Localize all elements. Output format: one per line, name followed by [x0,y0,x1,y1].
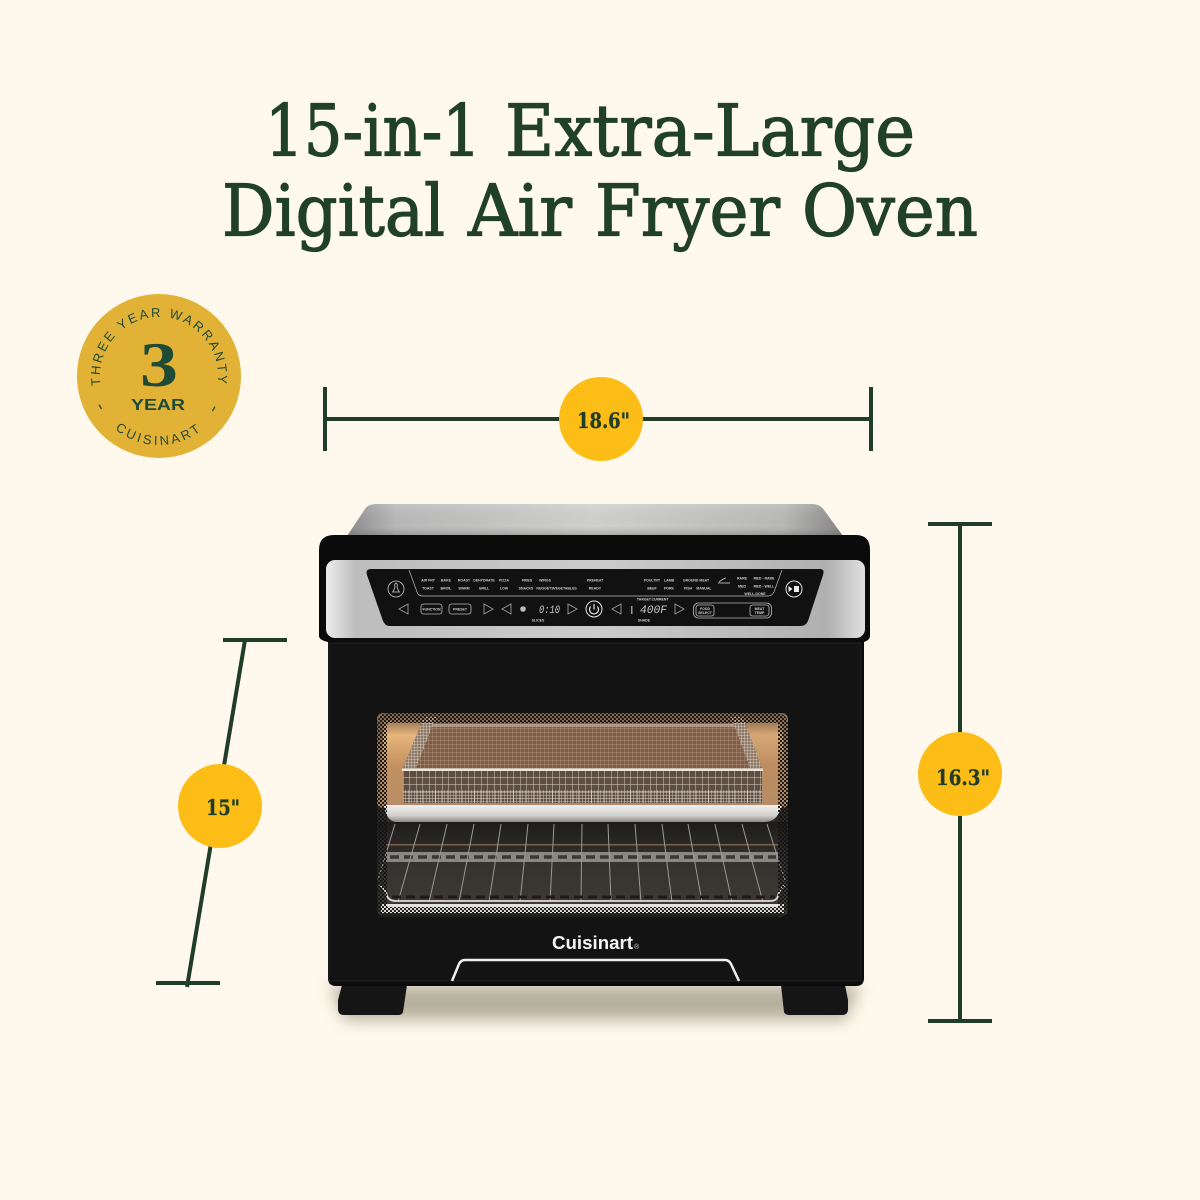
dimension: height 16.3 [918,524,1002,1021]
warranty badge: CUISINART [117,424,198,446]
mode labels: ROAST [458,578,471,582]
mode labels [421,576,775,596]
mode labels: PORK [664,586,675,590]
icon: thermometer [631,606,632,614]
mode labels: FRIES [522,578,533,582]
air fryer basket [402,717,763,803]
mode labels: WARM [458,586,470,590]
oven body [319,535,870,986]
food and meat button labels: FOOD [700,607,711,611]
floor shadow [330,985,860,1020]
Cuisinart logo: Cuisinart [552,932,633,953]
mode labels: GROUND MEAT [683,578,710,582]
Cuisinart logo: ® [634,943,640,951]
temperature labels: TARGET [637,598,652,602]
mode labels: DEHYDRATE [473,578,495,582]
mode labels: LAMB [664,578,675,582]
oven feet [338,985,848,1015]
food and meat button labels: SELECT [698,611,713,615]
mode labels: BAKE [441,578,452,582]
mode labels: READY [589,586,602,590]
lower cavity [378,822,787,914]
mode labels: VEGETABLES [553,586,577,590]
mode labels: GRILL [479,586,490,590]
preset button [449,604,471,614]
function button [421,604,442,614]
icon: meat probe [718,578,730,583]
icon: light bulb button [388,581,404,597]
dimension: width 18.6 [325,377,871,461]
dimension: height 16.3: 16.3" [936,765,990,790]
warm side walls [380,718,786,805]
mode labels: BEEF [647,586,658,590]
dimension: depth 15 [156,640,287,987]
food and meat button labels [698,607,765,615]
food and meat button labels: TEMP [755,611,765,615]
temperature labels: SHADE [638,618,651,622]
window frit edge [382,718,783,912]
mode labels: MED - RARE [754,576,775,580]
warranty badge: 3 [140,329,178,400]
dimension: width 18.6: 18.6" [577,408,630,433]
front rack rail [380,885,785,913]
function button: FUNCTION [422,607,441,611]
title: Fryer [595,170,780,252]
warranty badge [77,294,241,458]
mode labels: TOAST [422,586,435,590]
mode labels: MED [738,584,746,588]
mode labels: AIR FRY [421,578,436,582]
icon: clock [520,606,526,612]
oven window [377,713,788,917]
title: Digital [222,170,445,252]
upper cavity [377,713,788,808]
mode labels: POULTRY [644,578,661,582]
mode labels: LOW [500,586,509,590]
title [222,90,978,252]
mode labels: SNACKS [519,586,534,590]
control strip [326,560,865,638]
temperature display: 400F [640,605,667,617]
door handle [452,960,739,981]
mode labels: NUGGETS [536,586,554,590]
mode labels: PREHEAT [587,578,604,582]
dimension: depth 15: 15" [206,795,240,820]
warranty badge: THREE YEAR WARRANTY [91,308,228,386]
perforated strip [386,844,778,862]
food and meat buttons [694,603,772,618]
slices label: SLICES [532,618,545,622]
mode labels: WELL-DONE [744,592,766,596]
wire rack [378,824,785,902]
oven top [347,504,843,536]
food and meat button labels: MEAT [755,607,765,611]
temperature labels: CURRENT [651,598,669,602]
mode labels: PIZZA [499,578,510,582]
mode labels: RARE [737,576,748,580]
door [329,643,861,981]
title: Extra-Large [505,90,915,172]
power button [586,601,602,617]
arrows [399,604,684,614]
title: Oven [802,170,978,252]
temperature labels [637,598,669,622]
mode labels: BROIL [441,586,452,590]
baking tray [384,805,782,822]
oven [319,504,870,1020]
mode labels: MANUAL [696,586,712,590]
title: 15-in-1 [265,90,481,172]
mode labels: MED - WELL [754,584,775,588]
preset button: PRESET [453,607,468,611]
title: Air [467,170,572,252]
mode labels: FISH [684,586,692,590]
warranty badge: YEAR [131,397,185,414]
control panel [366,569,824,626]
mode labels: WINGS [539,578,552,582]
icon: play stop button [786,581,802,597]
time display: 0:10 [539,605,560,617]
